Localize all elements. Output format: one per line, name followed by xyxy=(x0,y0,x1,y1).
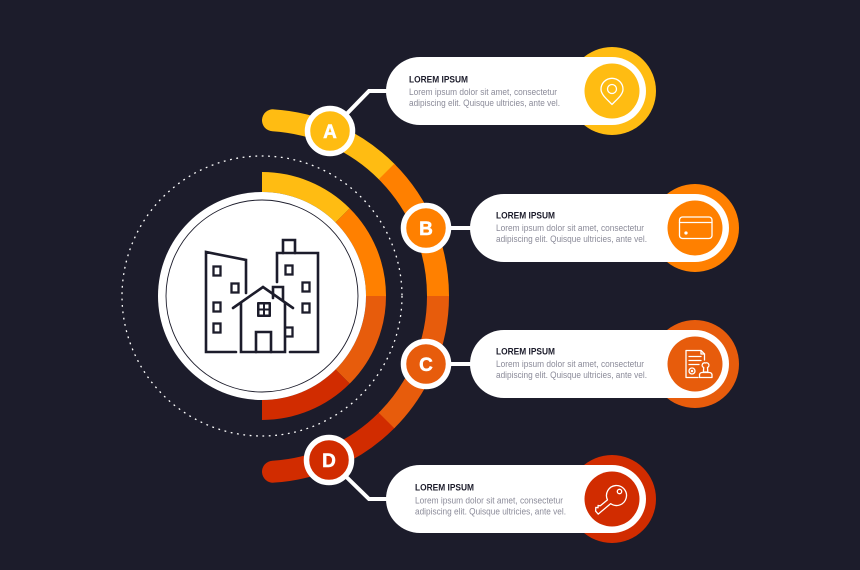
card A body: Lorem ipsum dolor sit amet, consectetur xyxy=(409,87,557,97)
card C body xyxy=(496,359,647,380)
connectors xyxy=(329,91,474,499)
dotted ring xyxy=(122,156,402,436)
card B heading: LOREM IPSUM xyxy=(496,210,555,222)
card B body: adipiscing elit. Quisque ultricies, ante vel. xyxy=(496,234,647,244)
node C: C xyxy=(419,355,433,376)
card C xyxy=(470,320,739,408)
icon: credit card xyxy=(680,217,712,238)
card B body xyxy=(496,223,647,244)
card D xyxy=(386,455,656,543)
inner segmented arc xyxy=(262,182,376,410)
card A body: adipiscing elit. Quisque ultricies, ante vel. xyxy=(409,98,560,108)
card D body: Lorem ipsum dolor sit amet, consectetur xyxy=(415,496,563,506)
node C xyxy=(404,342,448,386)
node D xyxy=(306,438,352,482)
card A heading: LOREM IPSUM xyxy=(409,74,468,86)
node A xyxy=(308,108,352,154)
outer segmented arc xyxy=(273,120,438,472)
card D heading: LOREM IPSUM xyxy=(415,482,474,494)
icon: key xyxy=(590,481,631,520)
icon: location pin xyxy=(601,78,623,104)
card C body: Lorem ipsum dolor sit amet, consectetur xyxy=(496,359,644,369)
card C body: adipiscing elit. Quisque ultricies, ante vel. xyxy=(496,370,647,380)
node D: D xyxy=(322,451,336,472)
card C heading: LOREM IPSUM xyxy=(496,346,555,358)
card A xyxy=(386,47,656,135)
card D body xyxy=(415,496,566,516)
node A: A xyxy=(323,122,337,143)
icon: city buildings and house xyxy=(206,240,318,352)
node B xyxy=(404,206,448,250)
icon: document with stamp xyxy=(686,350,712,378)
card A body xyxy=(409,87,560,108)
central white circle xyxy=(158,192,366,400)
card D body: adipiscing elit. Quisque ultricies, ante vel. xyxy=(415,506,566,516)
card B xyxy=(470,184,739,272)
node B: B xyxy=(419,219,433,240)
card B body: Lorem ipsum dolor sit amet, consectetur xyxy=(496,223,644,233)
